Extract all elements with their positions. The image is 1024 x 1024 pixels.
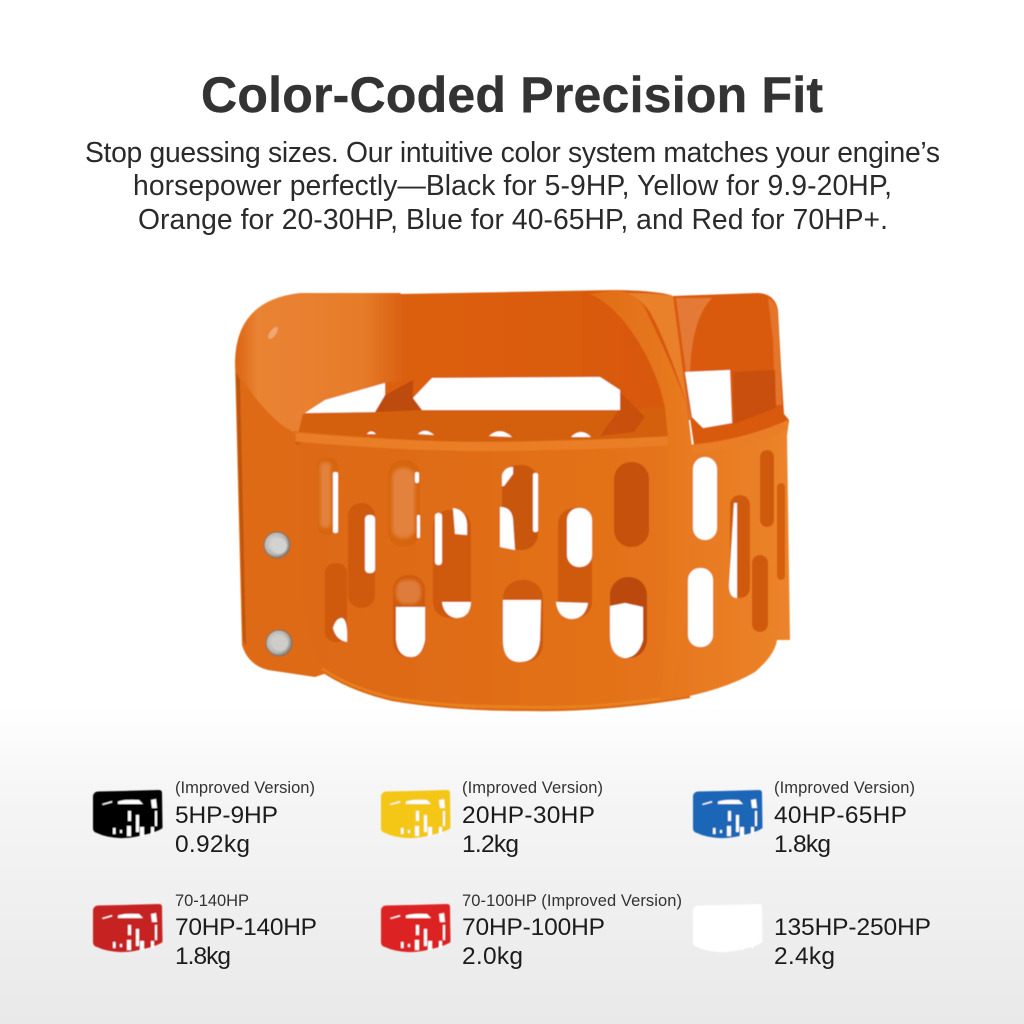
legend item: 135HP-250HP white: 2.4kg bbox=[774, 943, 835, 970]
legend item: 70HP-100HP red: 2.0kg bbox=[462, 943, 523, 970]
left ear bbox=[235, 293, 404, 432]
legend item: 70HP-140HP dark red: 70-140HP bbox=[175, 892, 249, 910]
intro text block: horsepower perfectly—Black for 5-9HP, Yellow for 9.9-20HP, bbox=[133, 169, 892, 201]
legend item: 70HP-140HP dark red: 70HP-140HP bbox=[175, 914, 317, 941]
title: Color-Coded Precision Fit bbox=[201, 67, 823, 123]
center rib bbox=[590, 290, 692, 699]
back openings bbox=[305, 383, 385, 413]
legend item: 135HP-250HP white bbox=[693, 904, 931, 970]
rivet bottom bbox=[266, 630, 292, 656]
left flange bbox=[235, 362, 330, 677]
intro text block bbox=[85, 136, 940, 235]
legend item: 70HP-140HP dark red bbox=[93, 892, 317, 970]
icon: white guard bbox=[693, 904, 762, 952]
legend item: 135HP-250HP white: 135HP-250HP bbox=[774, 914, 931, 941]
legend item: 70HP-140HP dark red: 1.8kg bbox=[175, 943, 231, 970]
icon: dark red guard bbox=[93, 904, 162, 952]
back right panel bbox=[672, 293, 789, 445]
legend item: 40HP-65HP blue bbox=[693, 779, 915, 858]
icon: yellow guard bbox=[381, 790, 450, 838]
legend item: 5HP-9HP black: (Improved Version) bbox=[175, 779, 315, 797]
legend item: 20HP-30HP yellow: 20HP-30HP bbox=[462, 802, 595, 829]
inner back band bbox=[295, 407, 672, 445]
legend item: 40HP-65HP blue: 40HP-65HP bbox=[774, 802, 907, 829]
legend item: 70HP-100HP red: 70HP-100HP bbox=[462, 914, 605, 941]
back wall bbox=[300, 290, 690, 420]
legend item: 5HP-9HP black bbox=[93, 779, 315, 858]
legend item: 20HP-30HP yellow: (Improved Version) bbox=[462, 779, 603, 797]
legend item: 20HP-30HP yellow bbox=[381, 779, 603, 858]
legend item: 5HP-9HP black: 5HP-9HP bbox=[175, 802, 278, 829]
product photo: orange motor guard bbox=[235, 290, 790, 710]
slot highlights bbox=[320, 462, 421, 604]
legend item: 70HP-100HP red: 70-100HP (Improved Version) bbox=[462, 892, 682, 910]
front band bbox=[293, 431, 690, 710]
icon: red guard bbox=[381, 904, 450, 952]
legend item: 20HP-30HP yellow: 1.2kg bbox=[462, 831, 519, 858]
inner holes bbox=[367, 431, 591, 437]
slots recess bbox=[317, 450, 785, 662]
slot see-through openings bbox=[333, 457, 737, 662]
bottom hem bbox=[322, 669, 670, 707]
icon: black guard bbox=[93, 790, 162, 838]
intro text block: Stop guessing sizes. Our intuitive color system matches your engine’s bbox=[85, 136, 940, 168]
legend item: 40HP-65HP blue: 1.8kg bbox=[774, 831, 831, 858]
right band bbox=[670, 420, 790, 700]
ear highlight bbox=[267, 326, 279, 340]
icon: blue guard bbox=[693, 790, 762, 838]
rivet top bbox=[264, 532, 290, 558]
front rim bbox=[296, 437, 668, 447]
intro text block: Orange for 20-30HP, Blue for 40-65HP, and Red for 70HP+. bbox=[138, 203, 888, 235]
legend item: 40HP-65HP blue: (Improved Version) bbox=[774, 779, 915, 797]
legend item: 70HP-100HP red bbox=[381, 892, 682, 970]
legend item: 5HP-9HP black: 0.92kg bbox=[175, 831, 250, 858]
